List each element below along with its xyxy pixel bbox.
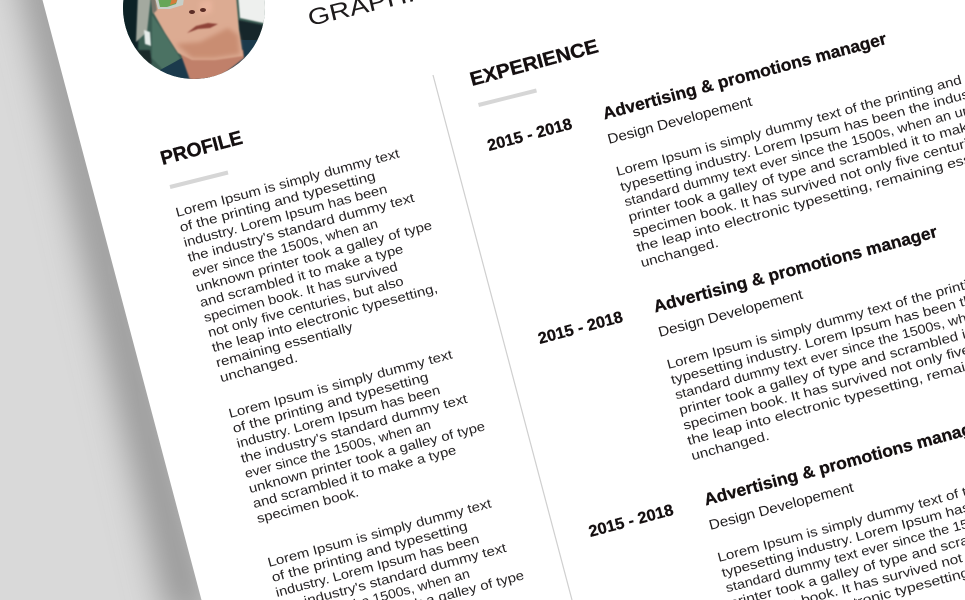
profile underline: [170, 172, 228, 187]
profile paragraph 3: of the printing and typesetting: [270, 518, 469, 585]
description: [716, 440, 965, 600]
profile paragraph 2: industry. Lorem Ipsum has been: [235, 382, 442, 451]
profile paragraph 3: [266, 492, 526, 600]
profile paragraph 1: remaining essentially: [214, 319, 355, 370]
profile paragraph 1: ever since the 1500s, when an: [190, 216, 379, 280]
paper shadow: [18, 0, 212, 600]
experience entry 3: [587, 415, 965, 600]
description: unchanged.: [690, 428, 771, 463]
experience entry 2: [536, 222, 965, 463]
profile paragraph 1: [174, 142, 458, 385]
profile paragraph 1: specimen book. It has survived: [202, 259, 399, 325]
department: Design Developement: [606, 93, 754, 147]
profile paragraph 2: [227, 343, 495, 526]
profile paragraph 2: Lorem Ipsum is simply dummy text: [227, 347, 454, 421]
profile paragraph 2: specimen book.: [255, 484, 360, 526]
profile paragraph 1: the leap into electronic typesetting,: [210, 280, 439, 355]
profile paragraph 2: unknown printer took a galley of type: [247, 418, 487, 496]
profile paragraph 1: not only five centuries, but also: [206, 273, 405, 340]
profile paragraph 1: the industry's standard dummy text: [186, 190, 416, 265]
description: Lorem Ipsum is simply dummy text of the printing and: [614, 72, 963, 179]
profile paragraph 1: unchanged.: [218, 350, 299, 385]
profile paragraph 1: Lorem Ipsum is simply dummy text: [174, 146, 401, 220]
department: Design Developement: [707, 479, 855, 533]
description: standard dummy text ever since the 1500s, when an unknown: [623, 91, 965, 209]
description: [665, 247, 965, 463]
description: unchanged.: [639, 235, 720, 270]
profile paragraph 2: and scrambled it to make a type: [251, 442, 458, 511]
profile paragraph 2: of the printing and typesetting: [231, 369, 430, 436]
profile paragraph 1: industry. Lorem Ipsum has been: [182, 181, 389, 250]
date: 2015 - 2018: [486, 116, 574, 155]
profile paragraph 2: the industry's standard dummy text: [239, 391, 469, 466]
profile paragraph 1: of the printing and typesetting: [178, 168, 377, 235]
role: Advertising & promotions manager: [601, 29, 889, 123]
profile paragraph 3: Lorem Ipsum is simply dummy text: [266, 496, 493, 570]
profile paragraph 1: and scrambled it to make a type: [198, 241, 405, 310]
experience entry 1: [486, 29, 965, 270]
photo: portrait: [123, 0, 265, 79]
description: Lorem Ipsum is simply dummy text of the printing and: [665, 265, 965, 372]
description: printer took a galley of type and scrambled it to make a type: [627, 105, 965, 225]
date: 2015 - 2018: [587, 502, 676, 541]
department: Design Developement: [656, 286, 805, 340]
heading: experience: EXPERIENCE: [468, 35, 601, 91]
experience underline: [478, 90, 536, 105]
column divider: [433, 75, 572, 600]
description: the leap into electronic typesetting, remaining essentially: [635, 138, 965, 255]
description: [614, 54, 965, 270]
profile paragraph 3: industry. Lorem Ipsum has been: [274, 531, 481, 600]
description: typesetting industry. Lorem Ipsum has been the industry's: [618, 79, 965, 194]
heading: profile: PROFILE: [158, 127, 245, 170]
role: Advertising & promotions manager: [651, 222, 940, 316]
profile paragraph 2: ever since the 1500s, when an: [243, 417, 432, 481]
profile paragraph 1: unknown printer took a galley of type: [194, 217, 434, 295]
date: 2015 - 2018: [536, 309, 625, 348]
